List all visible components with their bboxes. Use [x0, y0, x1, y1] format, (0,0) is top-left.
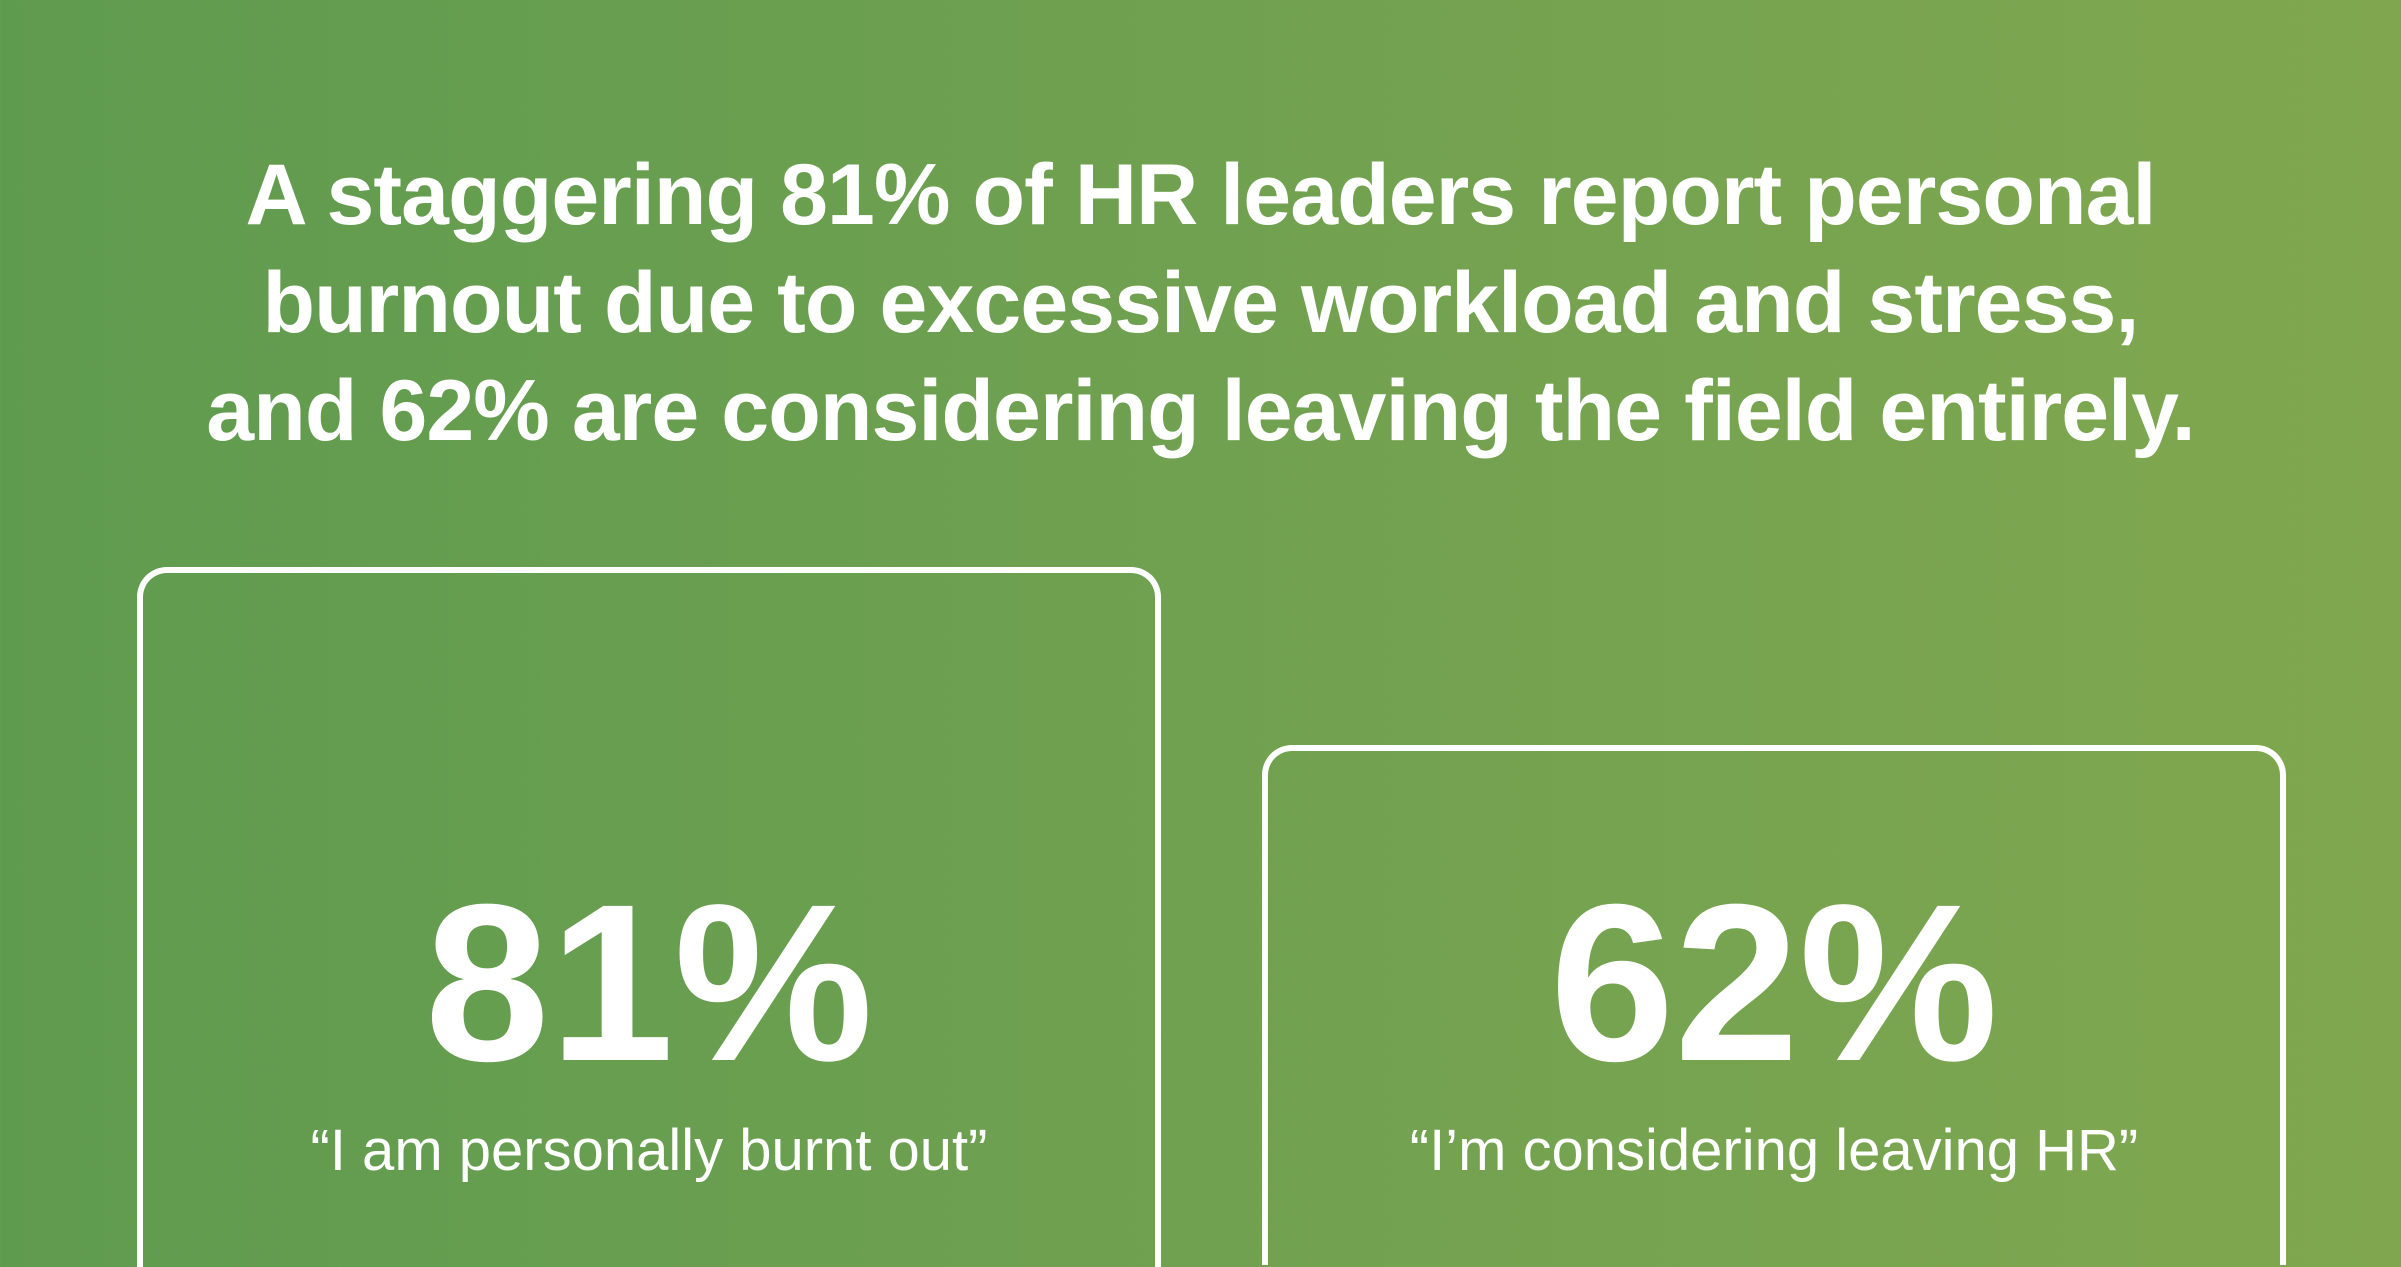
title: burnout due to excessive workload and stress, — [263, 255, 2138, 351]
title: and 62% are considering leaving the field entirely. — [206, 363, 2195, 459]
quote: leaving HR: “I’m considering leaving HR” — [1410, 1118, 2138, 1183]
panel: 62% leaving HR — [1262, 745, 2286, 1265]
stat: 62%: 62% — [1550, 858, 1998, 1108]
stat: 81%: 81% — [425, 858, 873, 1108]
quote: burnt out: “I am personally burnt out” — [311, 1118, 987, 1183]
panel: 81% burnt out — [137, 567, 1161, 1267]
title: A staggering 81% of HR leaders report personal — [245, 147, 2156, 243]
title — [206, 147, 2195, 459]
